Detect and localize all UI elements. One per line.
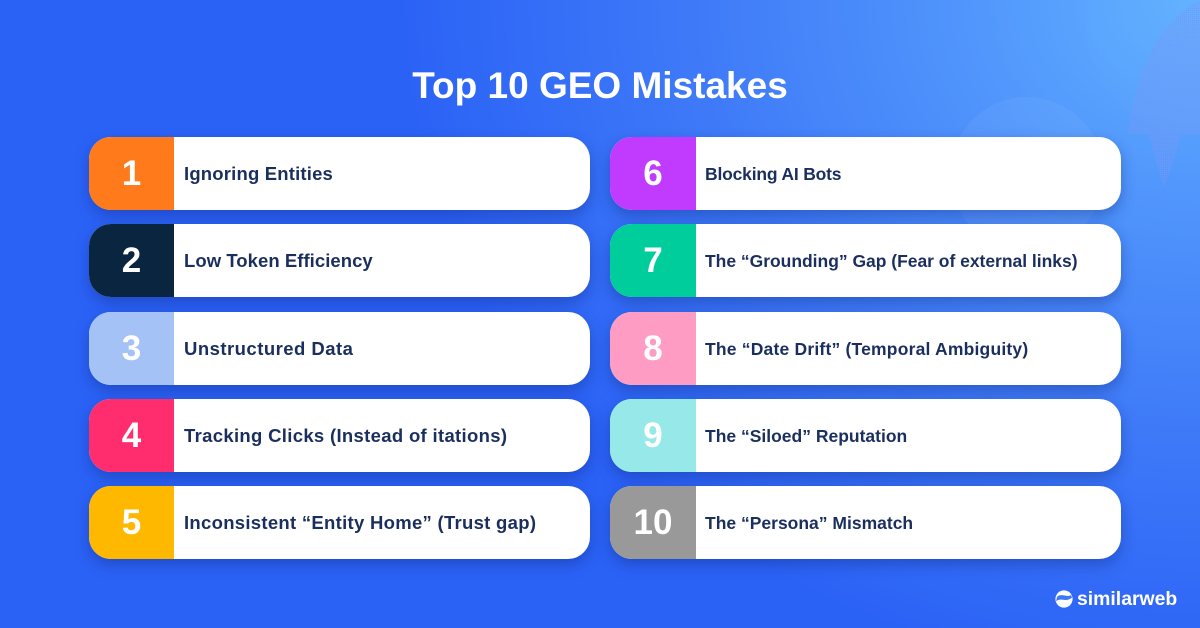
item 4: [89, 399, 590, 472]
item 6: [610, 137, 1121, 210]
item 7: [610, 224, 1121, 297]
item 8: 8: [643, 329, 663, 368]
item 5: Inconsistent “Entity Home” (Trust gap): [184, 512, 536, 533]
item 7: The “Grounding” Gap (Fear of external links): [705, 251, 1078, 271]
item 5: [89, 486, 590, 559]
item 4: Tracking Clicks (Instead of itations): [184, 425, 507, 446]
item 10: The “Persona” Mismatch: [705, 513, 913, 533]
item 2: 2: [122, 241, 141, 280]
item 2: [89, 224, 590, 297]
item 8: [610, 312, 1121, 385]
item 1: [89, 137, 590, 210]
item 10: [610, 486, 1121, 559]
item 3: Unstructured Data: [184, 338, 353, 359]
logo: similarweb: similarweb: [1077, 588, 1177, 610]
item 10: 10: [634, 503, 672, 542]
item 6: Blocking AI Bots: [705, 164, 841, 184]
item 3: 3: [122, 329, 141, 368]
item 3: [89, 312, 590, 385]
item 9: The “Siloed” Reputation: [705, 426, 907, 446]
item 9: [610, 399, 1121, 472]
item 7: 7: [643, 241, 663, 280]
item 9: 9: [643, 416, 663, 455]
item 1: 1: [122, 154, 141, 193]
item 8: The “Date Drift” (Temporal Ambiguity): [705, 339, 1028, 359]
item 5: 5: [122, 503, 141, 542]
item 1: Ignoring Entities: [184, 163, 333, 184]
item 6: 6: [643, 154, 663, 193]
item 4: 4: [122, 416, 141, 455]
item 2: Low Token Efficiency: [184, 250, 373, 271]
title: Top 10 GEO Mistakes: [412, 65, 788, 106]
